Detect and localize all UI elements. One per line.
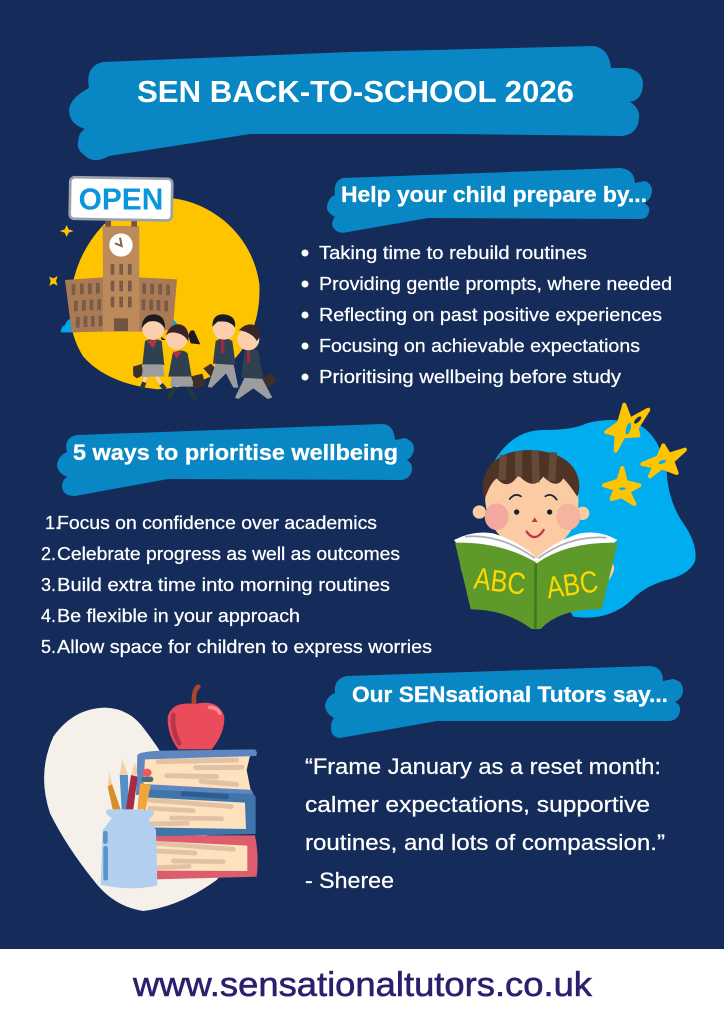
title banner [69,46,643,160]
numbered list: wellbeing: 2. [41,544,56,564]
clock [109,233,133,257]
hands [460,562,472,585]
heading text: Help your child prepare by... [341,182,647,207]
numbered list: wellbeing: 3. [41,575,56,595]
numbered list: wellbeing: Build extra time into morning routines [57,575,390,595]
illustration: four students walking [133,314,276,399]
yellow blob [70,198,260,389]
banner: help your child [327,168,652,233]
title text: SEN BACK-TO-SCHOOL 2026 [137,74,574,109]
student 2 [166,324,206,399]
numbered list: wellbeing: 4. [41,606,56,626]
quote: - Sheree [305,868,394,893]
numbered list: wellbeing [41,513,432,657]
numbered list: wellbeing: Focus on confidence over academics [57,513,377,533]
bottom book [155,835,258,879]
stars [604,405,685,504]
small cloud shapes [61,316,178,332]
student 4 [235,324,276,399]
numbered list: wellbeing: 1. [45,513,60,533]
face details [514,509,519,515]
heading text: 5 ways to prioritise wellbeing [73,440,398,465]
open sign [70,177,172,221]
pencils [108,759,153,809]
quote: “Frame January as a reset month: [305,754,661,779]
numbered list: wellbeing: 5. [41,637,56,657]
blue blob [495,420,696,618]
numbered list: wellbeing: Celebrate progress as well as outcomes [57,544,400,564]
illustration: school with students [49,177,260,389]
banner: 5 ways [57,424,414,496]
website url: www.sensationaltutors.co.uk [132,966,593,1004]
open book: ABC [544,564,600,605]
pencil jar [101,809,157,888]
quote: routines, and lots of compassion.” [305,830,665,855]
apple [168,687,224,749]
cream blob [44,708,220,911]
footer bar [0,949,724,1024]
numbered list: wellbeing: Be flexible in your approach [57,606,300,626]
illustration: boy reading [454,420,696,629]
bullet list: prepare: Reflecting on past positive experiences [319,305,662,325]
quote [305,754,665,893]
illustration: books, apple and pencils [44,687,258,911]
top book [136,749,257,795]
open sign: OPEN [79,182,163,216]
bullet list: prepare: Providing gentle prompts, where needed [319,274,672,294]
banner: tutors say [325,666,683,738]
bullet list: prepare: Taking time to rebuild routines [319,243,587,263]
student 3 [203,314,238,388]
bullet list: prepare [302,243,672,387]
student 1 [133,314,166,389]
open book: ABC [472,562,528,602]
hair [482,450,579,498]
school building [65,220,177,332]
windows [72,264,170,328]
open book [454,532,618,629]
middle book [143,788,256,837]
quote: calmer expectations, supportive [305,792,650,817]
heading text: Our SENsational Tutors say... [352,682,668,707]
sparkle stars [49,225,74,286]
bullet list: prepare: Prioritising wellbeing before study [319,367,621,387]
boy head [473,450,589,558]
numbered list: wellbeing: Allow space for children to express worries [57,637,432,657]
bullet list: prepare: Focusing on achievable expectations [319,336,640,356]
